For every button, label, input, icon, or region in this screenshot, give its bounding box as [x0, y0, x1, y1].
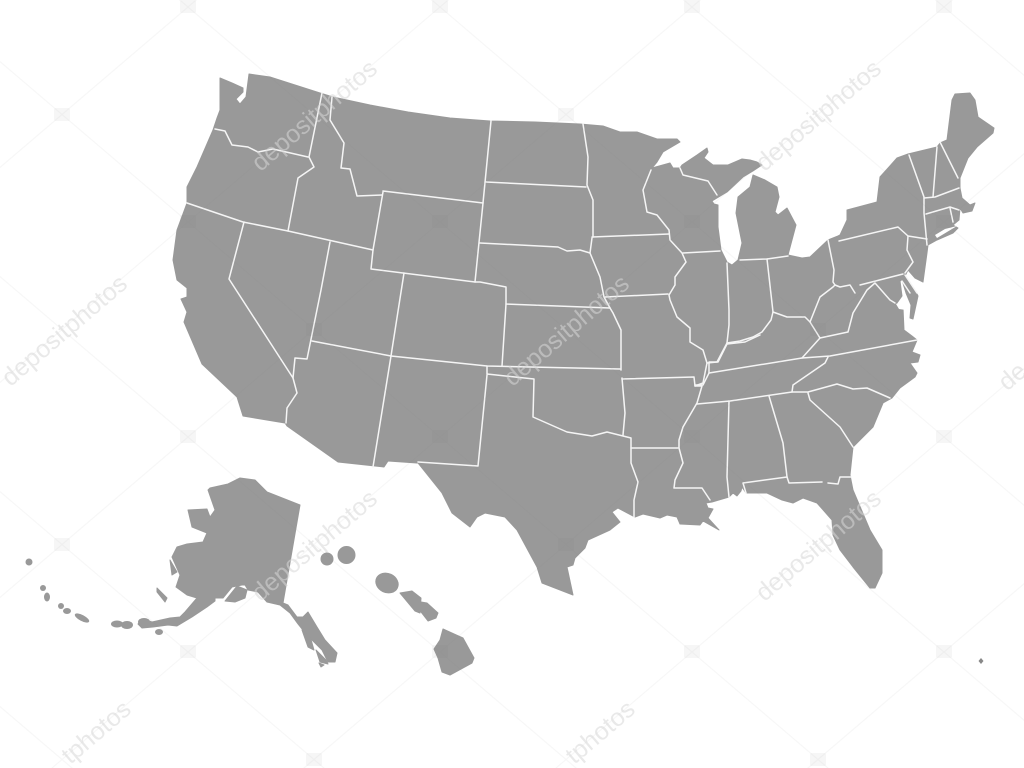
Nunivak and Pribilof islands [157, 560, 177, 602]
depositphotos watermarks: depositphotos [750, 484, 887, 607]
depositphotos watermarks: tphotos [56, 695, 137, 768]
contiguous United States silhouette [173, 74, 994, 595]
small island marker [978, 658, 984, 664]
depositphotos watermarks: depositphotos [246, 484, 383, 607]
Kodiak island [225, 586, 247, 602]
state borders [187, 93, 959, 517]
Hawaii [321, 546, 474, 675]
depositphotos watermarks: tphotos [560, 695, 641, 768]
Alaska [26, 478, 337, 667]
water cutouts: Long Island Sound and Chesapeake [896, 226, 957, 310]
Aleutian islands [26, 558, 163, 635]
depositphotos watermarks: depositphotos [0, 269, 133, 392]
depositphotos watermarks: depositphotos [498, 269, 635, 392]
Alaska mainland [138, 478, 337, 662]
depositphotos watermarks: depositphotos [246, 54, 383, 177]
Alaska southeast islands [302, 630, 328, 667]
depositphotos watermarks: depositphotos [750, 54, 887, 177]
